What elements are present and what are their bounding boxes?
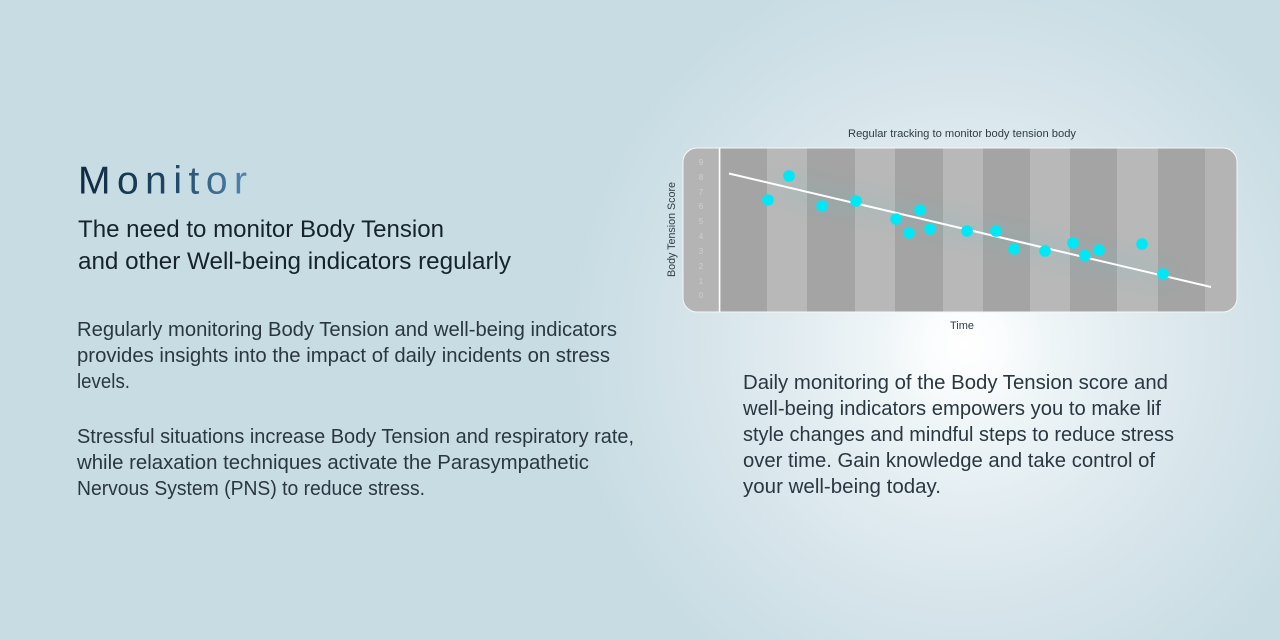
title: Monitor	[78, 160, 247, 202]
subheading: and other Well-being indicators regularly	[78, 248, 511, 275]
y axis ticks: 6	[699, 202, 704, 211]
y axis ticks: 9	[699, 158, 704, 167]
text block: insights	[77, 319, 617, 393]
text block: insights: levels.	[77, 371, 130, 393]
y axis ticks: 3	[699, 247, 704, 256]
y axis line	[718, 148, 720, 312]
text block: daily monitoring: style changes and mindful steps to reduce stress	[743, 424, 1174, 446]
plot area with bands	[683, 148, 1237, 312]
chart: body tension over time	[666, 128, 1237, 332]
text block: daily monitoring: over time. Gain knowledge and take control of	[743, 450, 1155, 472]
y axis ticks: 0	[699, 291, 704, 300]
text block: stressful situations	[76, 426, 634, 500]
data points	[762, 170, 1169, 280]
text block: daily monitoring: well-being indicators empowers you to make lif	[742, 398, 1161, 420]
y axis ticks: 4	[699, 232, 704, 241]
text block: insights: provides insights into the impact of daily incidents on stress	[77, 345, 610, 367]
y axis ticks: 7	[699, 188, 704, 197]
y axis ticks: 8	[699, 173, 704, 182]
text block: daily monitoring: Daily monitoring of the Body Tension score and	[743, 372, 1168, 394]
y axis ticks: 2	[699, 262, 704, 271]
trend line	[729, 174, 1211, 287]
y axis ticks: 5	[699, 217, 704, 226]
subheading: The need to monitor Body Tension	[78, 216, 444, 243]
text block: daily monitoring: your well-being today.	[743, 476, 941, 498]
y axis ticks: 1	[699, 277, 704, 286]
text block: daily monitoring	[742, 372, 1174, 498]
text block: stressful situations: Stressful situations increase Body Tension and respiratory rate,	[77, 426, 634, 448]
text block: insights: Regularly monitoring Body Tension and well-being indicators	[77, 319, 617, 341]
y axis label: Body Tension Score	[666, 182, 678, 277]
plot border	[683, 148, 1237, 312]
chart title: Regular tracking to monitor body tension body	[848, 128, 1077, 140]
subheading	[78, 216, 511, 275]
y axis ticks	[699, 158, 704, 300]
text block: stressful situations: Nervous System (PNS) to reduce stress.	[77, 478, 425, 500]
x axis label: Time	[950, 320, 974, 332]
text block: stressful situations: while relaxation techniques activate the Parasympathetic	[76, 452, 589, 474]
